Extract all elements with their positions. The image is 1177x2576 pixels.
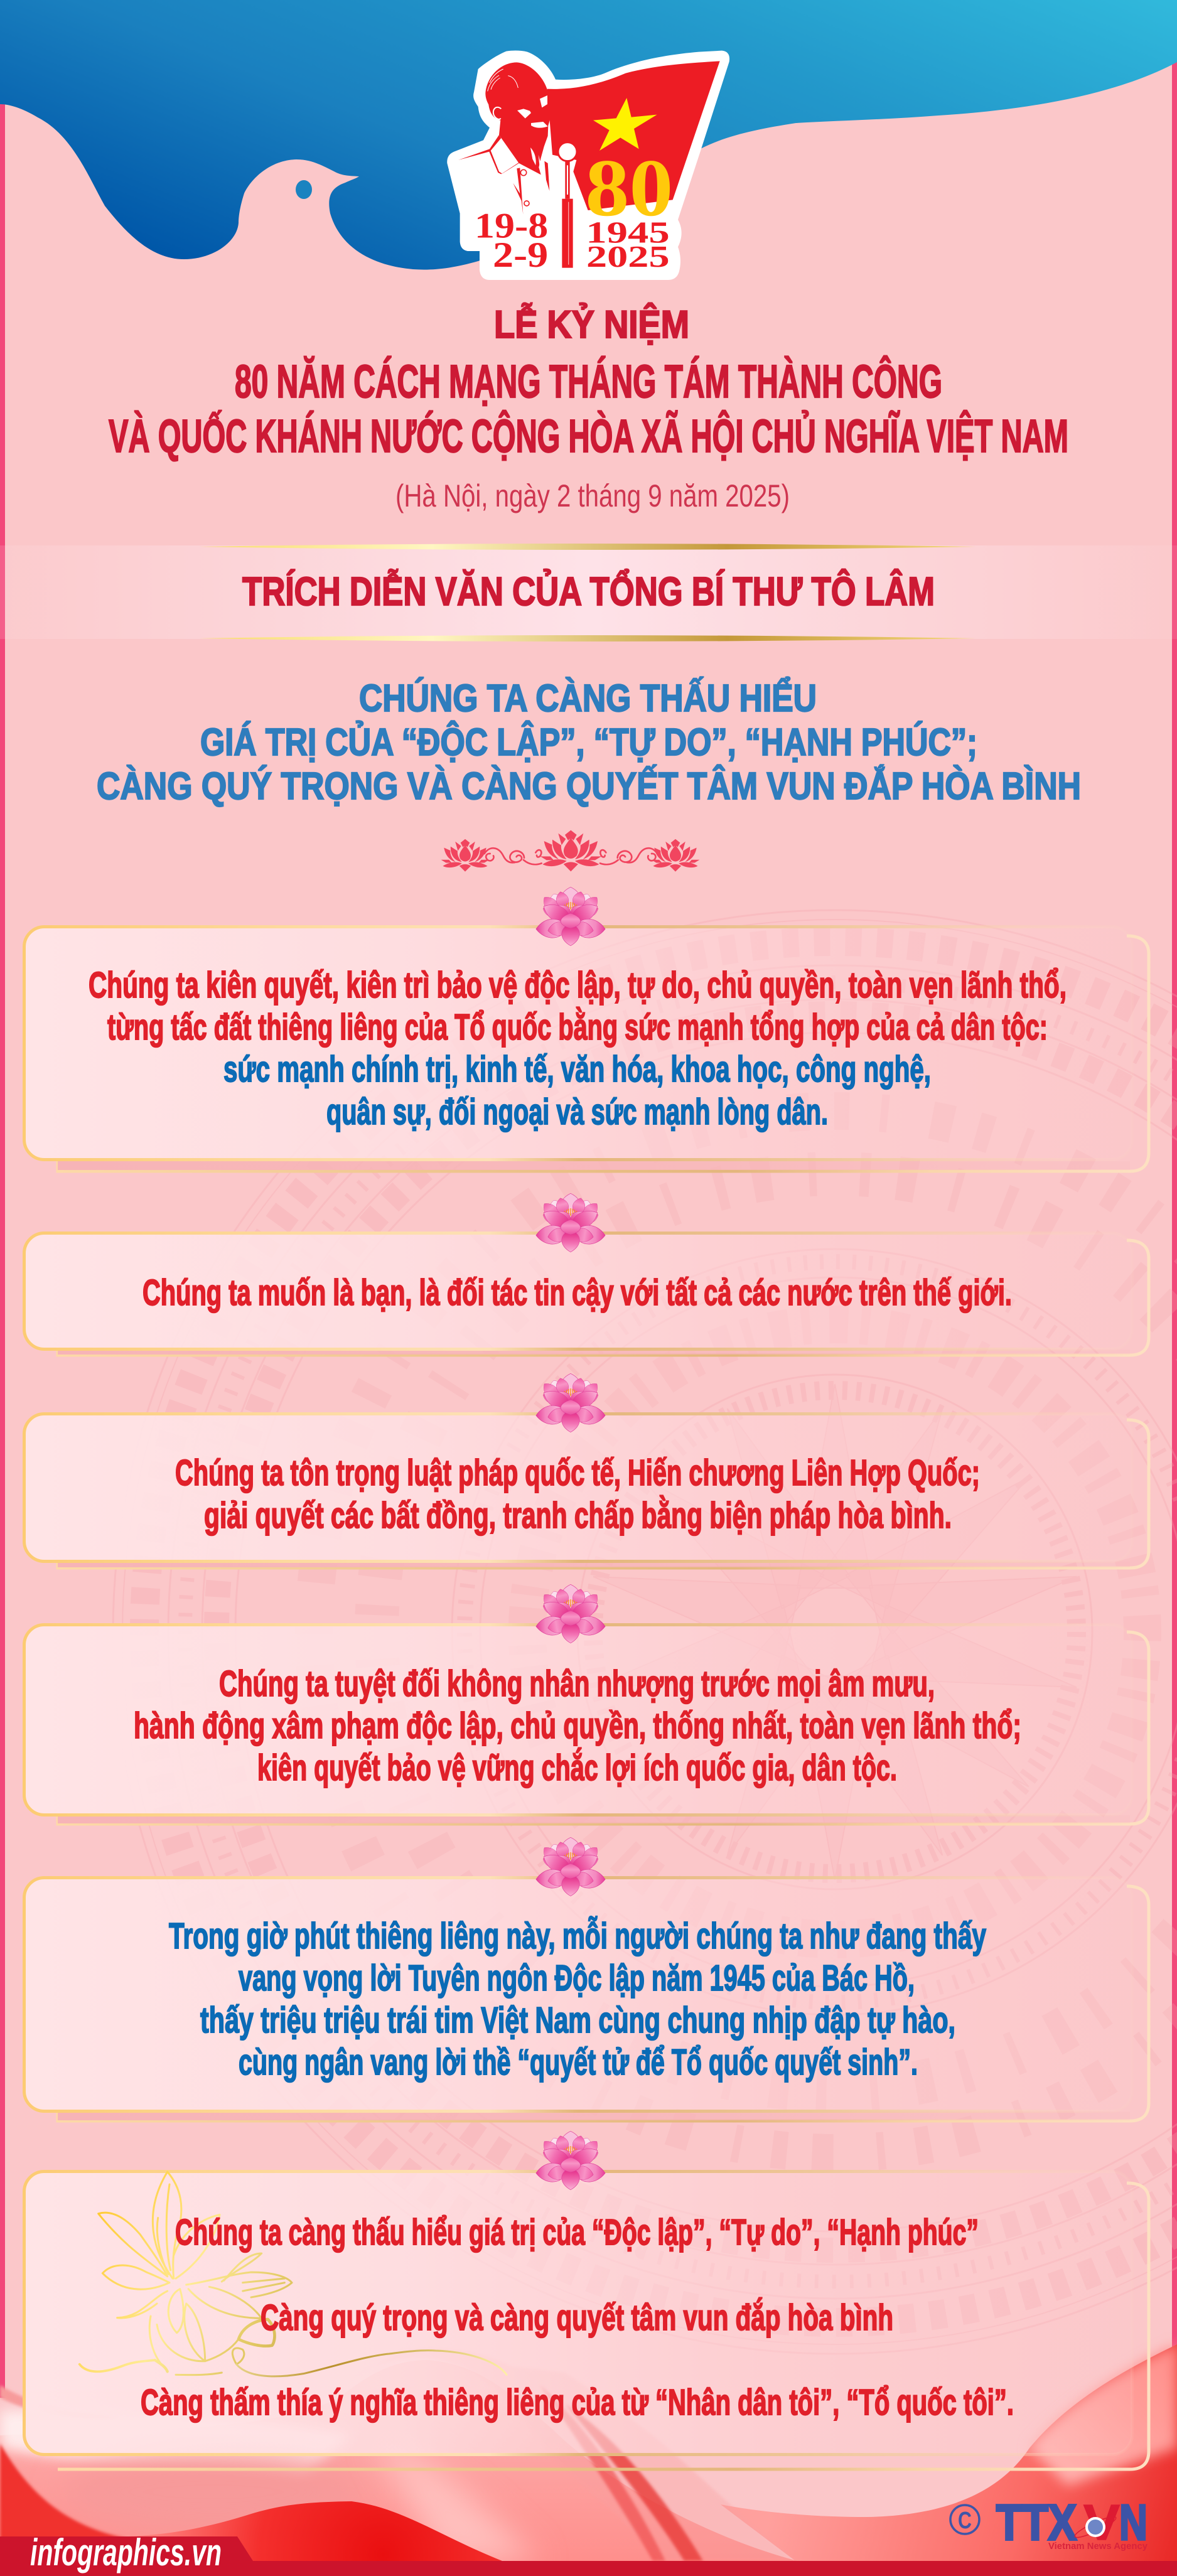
icon: golden lotus line art: [80, 2172, 507, 2376]
banner: [0, 544, 1177, 641]
footer: infographics.vn tag: infographics.vn: [30, 2531, 222, 2573]
panel: card 6: Càng quý trọng và càng quyết tâm vun đắp hòa bình: [261, 2297, 893, 2338]
logo: TTXVN agency: N: [1119, 2494, 1147, 2550]
silk waves at bottom: [0, 2344, 1177, 2561]
banner heading: TRÍCH DIỄN VĂN CỦA TỔNG BÍ THƯ TÔ LÂM: [242, 569, 935, 614]
sub heading: CHÚNG TA CÀNG THẤU HIỂU: [359, 677, 817, 719]
panel: card 2: [24, 1233, 1149, 1355]
panel: card 3: [24, 1414, 1149, 1568]
logo star: [593, 98, 657, 151]
panel: card 4: kiên quyết bảo vệ vững chắc lợi ích quốc gia, dân tộc.: [257, 1747, 897, 1788]
copyright mark: C: [958, 2508, 972, 2534]
footer bar: [0, 2561, 1177, 2576]
logo dates: 2025: [586, 240, 670, 274]
panel: card 4: [24, 1624, 1149, 1824]
logo dates: 2-9: [493, 235, 548, 275]
sub heading: GIÁ TRỊ CỦA “ĐỘC LẬP”, “TỰ DO”, “HẠNH PHÚC”;: [200, 721, 977, 763]
logo portrait: [458, 62, 551, 215]
icon: lotus 5: [536, 1837, 605, 1896]
ornament: lotus divider: [441, 830, 699, 872]
logo: TTXVN agency: TTX: [996, 2494, 1077, 2550]
logo number 80: 80: [585, 143, 673, 233]
icon: lotus 6: [536, 2131, 605, 2190]
logo dates: 1945: [586, 216, 670, 250]
icon: lotus 4: [536, 1584, 605, 1643]
title: [109, 303, 1068, 462]
copyright mark: [950, 2505, 979, 2534]
panel: card 1: quân sự, đối ngoại và sức mạnh lòng dân.: [326, 1092, 828, 1132]
logo: 80 years emblem: [447, 51, 729, 280]
footer: infographics.vn tag: [0, 2531, 253, 2576]
icon: lotus 3: [536, 1373, 605, 1432]
watermark: bronze drum: [113, 910, 1177, 2354]
panel: card 5: [24, 1878, 1149, 2121]
icon: lotus 2: [536, 1193, 605, 1252]
panel: card 1: [24, 926, 1149, 1171]
logo microphone: [558, 142, 577, 268]
blue sky and dove shape: [0, 0, 1177, 270]
panel: card 6: [24, 2172, 1149, 2469]
logo dates: [475, 206, 670, 275]
sub heading: [97, 677, 1081, 807]
logo white outline: [447, 51, 729, 280]
logo dates: 19-8: [475, 206, 548, 245]
date line: (Hà Nội, ngày 2 tháng 9 năm 2025): [395, 478, 790, 513]
logo: TTXVN agency: V: [1083, 2494, 1120, 2550]
icon: lotus 1: [536, 887, 605, 946]
title: LỄ KỶ NIỆM: [494, 303, 689, 346]
logo: TTXVN agency: Vietnam News Agency: [1048, 2541, 1148, 2552]
logo flag: [547, 61, 720, 210]
logo: TTXVN agency: [950, 2494, 1148, 2552]
icon: dove eye: [296, 180, 312, 199]
